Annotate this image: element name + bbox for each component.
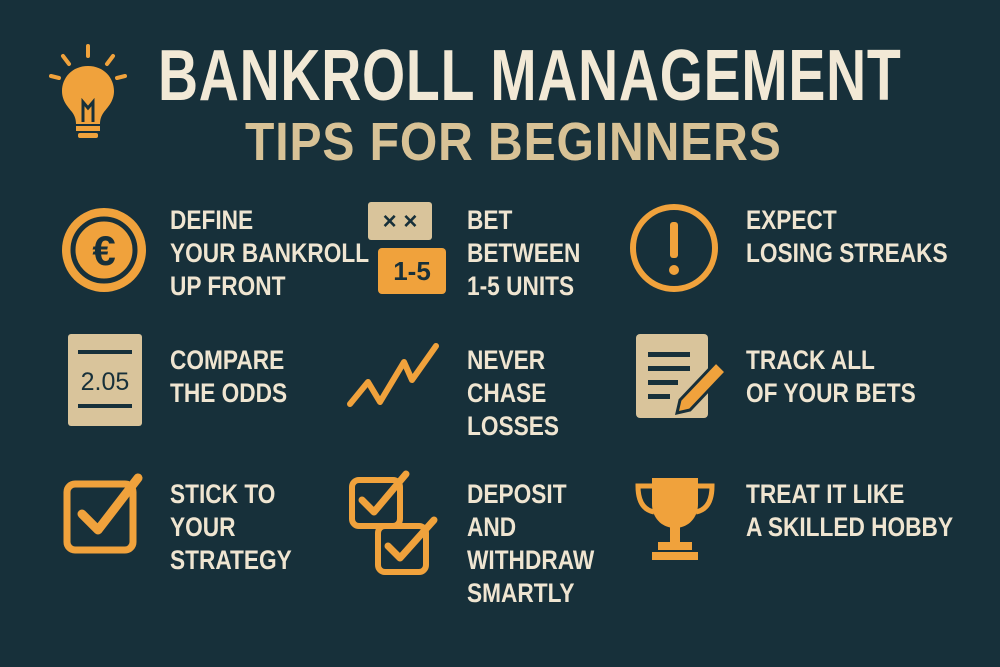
text: track bets [746,345,916,408]
subtitle: TIPS FOR BEGINNERS [245,112,782,172]
text: compare the odds: THE ODDS [170,378,287,408]
icon: euro coin: € [92,227,116,274]
text: never chase losses [467,345,559,441]
text: compare the odds: COMPARE [170,345,284,375]
text: track bets: TRACK ALL [746,345,875,375]
text: deposit withdraw: WITHDRAW [467,545,594,575]
text: never chase losses: LOSSES [467,411,559,441]
text: stick to strategy [170,479,292,575]
text: treat like hobby: A SKILLED HOBBY [746,512,953,542]
icon: trophy [636,478,714,560]
text: deposit withdraw: DEPOSIT [467,479,567,509]
text: never chase losses: CHASE [467,378,546,408]
icon: odds slip [68,334,142,426]
text: define bankroll [170,205,369,301]
text: compare the odds [170,345,287,408]
text: define bankroll: DEFINE [170,205,253,235]
text: track bets: OF YOUR BETS [746,378,916,408]
text: deposit withdraw: AND [467,512,516,542]
icon: zigzag line [347,343,439,407]
text: bet between: BET [467,205,512,235]
text: stick to strategy: STRATEGY [170,545,292,575]
text: never chase losses: NEVER [467,345,545,375]
text: stick to strategy: YOUR [170,512,236,542]
text: treat like hobby: TREAT IT LIKE [746,479,904,509]
icon: exclamation [630,204,718,292]
text: define bankroll: UP FRONT [170,271,286,301]
text: define bankroll: YOUR BANKROLL [170,238,369,268]
text: stick to strategy: STICK TO [170,479,275,509]
text: expect losing streaks [746,205,948,268]
icon: euro coin [62,208,146,292]
icon: units: 1-5 [393,256,431,286]
icon: odds slip: 2.05 [81,368,129,396]
text: bet between: 1-5 UNITS [467,271,574,301]
text: expect losing streaks: EXPECT [746,205,837,235]
icon: notepad pencil [636,334,724,418]
text: treat like hobby [746,479,953,542]
text: deposit withdraw [467,479,594,608]
icon: units [368,202,446,294]
icon: units: × × [383,208,417,235]
icon: double checkbox [349,470,438,575]
text: bet between: BETWEEN [467,238,580,268]
icon: light bulb [49,44,127,138]
title: BANKROLL MANAGEMENT [158,36,902,116]
text: expect losing streaks: LOSING STREAKS [746,238,948,268]
icon: checkbox [64,474,142,554]
text: bet between [467,205,580,301]
text: deposit withdraw: SMARTLY [467,578,575,608]
